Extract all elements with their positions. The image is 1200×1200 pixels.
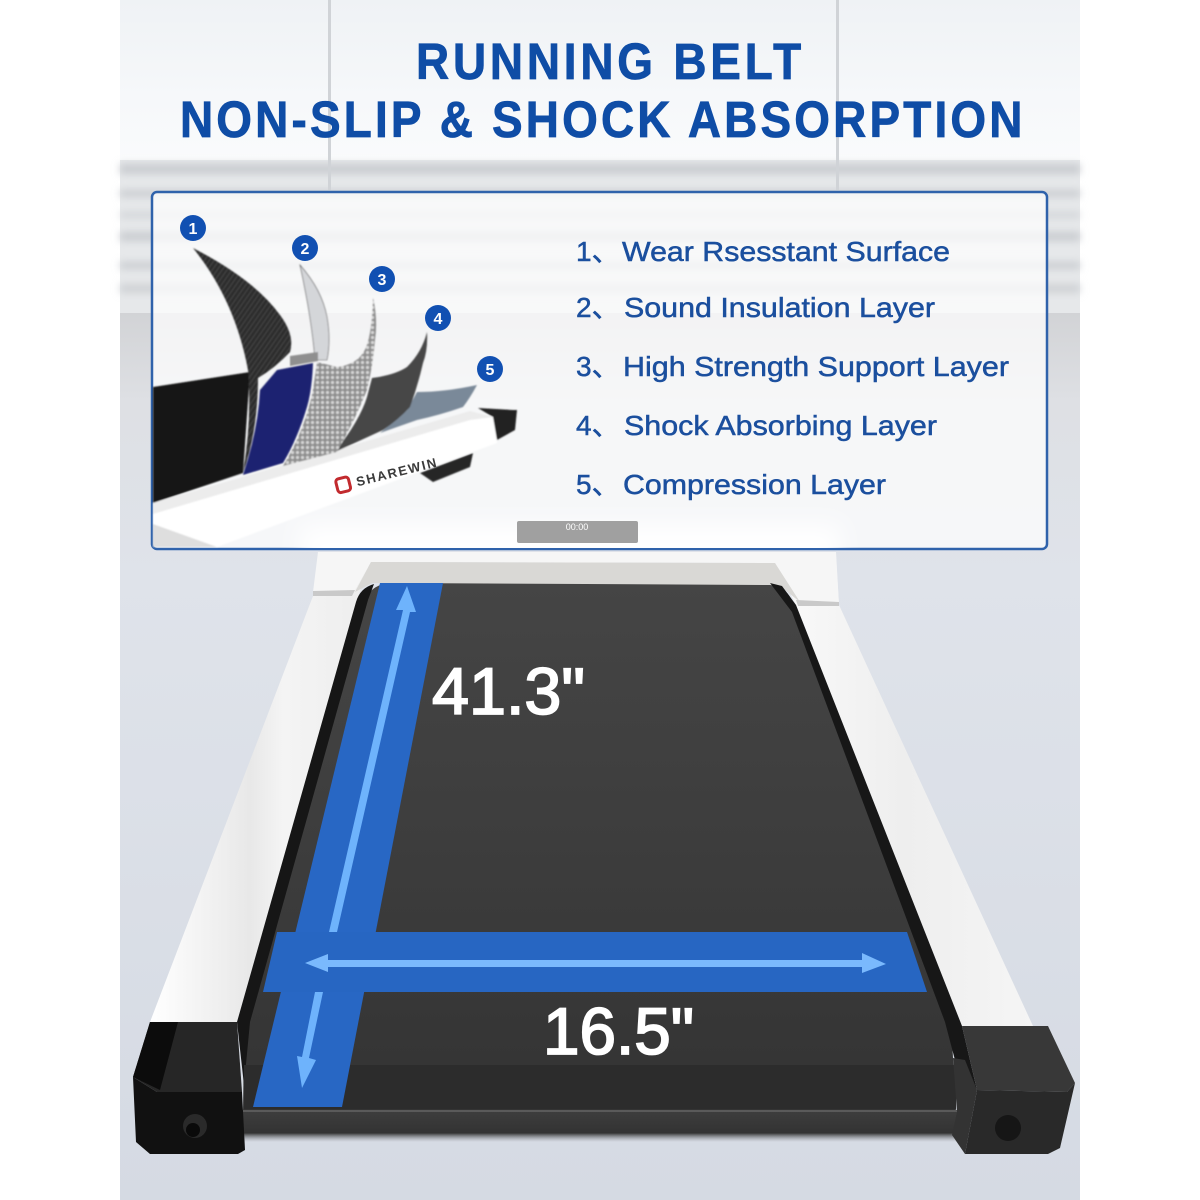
belt side trim right — [770, 583, 977, 1090]
layer blue foam — [243, 363, 313, 475]
number badge 1: 1 — [189, 221, 198, 238]
belt side trim left — [237, 584, 374, 1085]
right end cap — [952, 1026, 1075, 1154]
rear roller — [238, 1110, 960, 1142]
list item 2: Sound Insulation Layer — [624, 292, 935, 323]
belt section — [153, 372, 250, 503]
layer 1: wear surface — [193, 248, 291, 473]
number badge 3: 3 — [378, 272, 387, 289]
title line 1: RUNNING BELT — [416, 34, 802, 91]
layer 2: sound insulation — [300, 265, 329, 360]
number badge 1 — [180, 215, 206, 241]
title line 2: NON-SLIP & SHOCK ABSORPTION — [180, 92, 1022, 149]
console top — [284, 521, 856, 548]
list item 1: 1、 — [576, 236, 620, 267]
number badge 2: 2 — [301, 241, 310, 258]
list item 5: Compression Layer — [623, 469, 886, 500]
running belt surface — [243, 583, 956, 1112]
blue dimension band: width — [263, 932, 927, 992]
left side rail — [150, 556, 372, 1022]
background scene — [120, 0, 1080, 1200]
layer list — [576, 236, 1009, 500]
panel: belt layers — [152, 192, 1047, 575]
dimension: 16.5 inches: 16.5" — [543, 994, 694, 1068]
arrow: width — [305, 953, 886, 973]
layer 3: support — [283, 297, 376, 466]
right side rail — [772, 556, 1033, 1026]
brand logo — [335, 455, 438, 494]
list item 2: 2、 — [576, 292, 620, 323]
layer 4: shock absorbing — [335, 332, 427, 452]
console top: 00:00 — [566, 522, 588, 532]
number badge 5: 5 — [486, 362, 495, 379]
list item 4: Shock Absorbing Layer — [624, 410, 937, 441]
front frame cap — [313, 552, 839, 606]
layered belt illustration — [153, 248, 517, 547]
list item 1: Wear Rsesstant Surface — [622, 236, 950, 267]
list item 5: 5、 — [576, 469, 620, 500]
number badge 2 — [292, 235, 318, 261]
list item 3: High Strength Support Layer — [623, 351, 1009, 382]
list item 3: 3、 — [576, 351, 620, 382]
number badge 4: 4 — [434, 311, 443, 328]
panel frame — [152, 192, 1047, 549]
logo mark — [335, 476, 351, 493]
end cap — [478, 408, 517, 440]
title — [180, 34, 1022, 149]
layer 5: compression — [380, 385, 477, 433]
number badge 5 — [477, 356, 503, 382]
dimension: 41.3 inches: 41.3" — [432, 654, 585, 728]
number badge 4 — [425, 305, 451, 331]
treadmill — [133, 552, 1075, 1154]
left end cap — [133, 1022, 245, 1154]
foot — [420, 453, 473, 482]
arrow: length — [297, 586, 416, 1088]
metal bracket — [290, 352, 318, 366]
belt rear dark band — [244, 1065, 956, 1109]
blue dimension band: length — [253, 583, 443, 1107]
list item 4: 4、 — [576, 410, 620, 441]
number badge 3 — [369, 266, 395, 292]
brand name: SHAREWIN — [355, 455, 438, 489]
side rail — [153, 411, 497, 547]
